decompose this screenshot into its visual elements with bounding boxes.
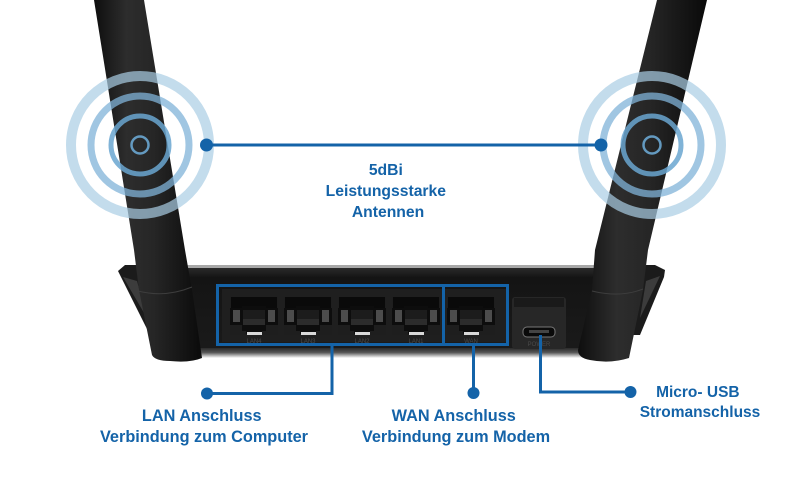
USB label: Micro- USB	[656, 384, 740, 401]
ethernet ports: LAN3	[300, 339, 316, 345]
right antenna	[578, 0, 707, 362]
WAN connector	[468, 345, 480, 399]
ethernet ports	[222, 289, 506, 345]
port highlight frames	[218, 285, 508, 345]
WAN label: WAN Anschluss	[392, 407, 516, 425]
signal rings: left	[71, 76, 209, 214]
antenna label: Antennen	[352, 204, 424, 221]
LAN label: LAN Anschluss	[142, 407, 262, 425]
ethernet ports: LAN4	[246, 339, 262, 345]
USB connector	[540, 335, 636, 398]
antenna connector line	[200, 138, 608, 152]
micro-USB port	[512, 297, 566, 349]
signal rings: right	[583, 76, 721, 214]
antenna label: 5dBi	[369, 162, 403, 179]
antenna label: Leistungsstarke	[326, 183, 446, 200]
micro-USB port: POWER	[528, 342, 551, 348]
ethernet ports: WAN	[464, 339, 478, 345]
ethernet ports: LAN2	[354, 339, 370, 345]
USB label: Stromanschluss	[640, 404, 760, 421]
left antenna	[94, 0, 202, 362]
ethernet ports: LAN1	[408, 339, 424, 345]
LAN label: Verbindung zum Computer	[100, 428, 309, 446]
LAN connector	[201, 345, 332, 400]
router body	[118, 265, 665, 358]
WAN label: Verbindung zum Modem	[362, 428, 550, 446]
